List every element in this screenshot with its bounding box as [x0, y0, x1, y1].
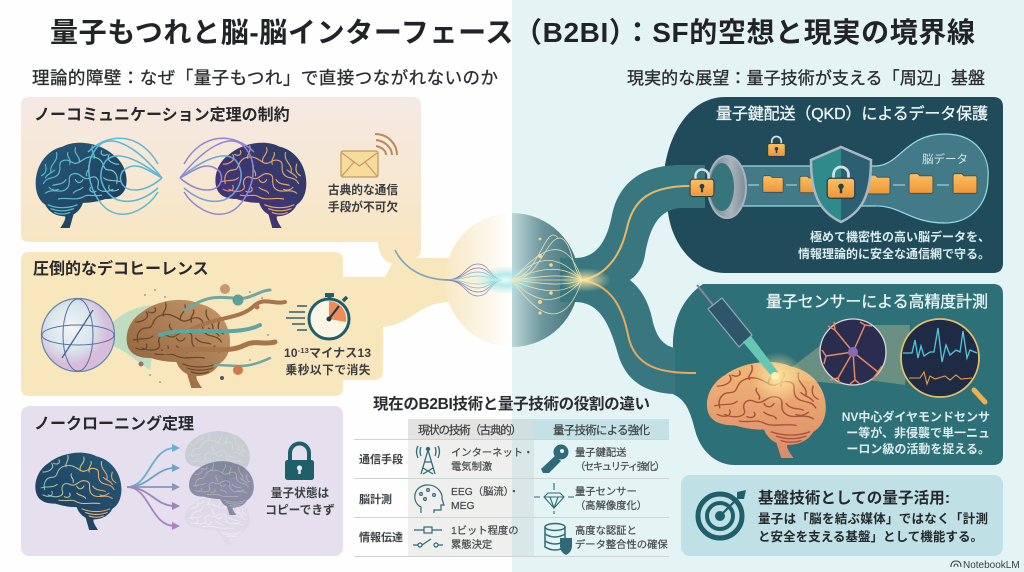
heading: 圧倒的なデコヒーレンス: [33, 259, 209, 278]
icon: orange brain: [707, 362, 826, 458]
icon: left brain: [36, 143, 127, 228]
row: communication: [416, 444, 665, 474]
icon: probe: [697, 285, 779, 380]
description: ー等が、非侵襲で単一ニュ: [846, 425, 990, 440]
arrows: [127, 448, 175, 526]
icon: stopwatch: [286, 293, 349, 339]
note: マイナス13: [309, 346, 371, 360]
icon: small lock: [768, 136, 785, 156]
row: brain measurement: 量子センサー: [575, 486, 637, 498]
row: information transfer: データ整合性の確保: [575, 538, 668, 551]
icon: neuron circle: [820, 319, 886, 385]
description: NV中心ダイヤモンドセンサ: [842, 409, 990, 424]
icon: pipe ring: [708, 156, 746, 218]
icon: switches: [413, 527, 443, 547]
column headers: 現状の技術（古典的）: [418, 423, 522, 437]
fan dots: [538, 238, 553, 315]
note: [265, 486, 335, 517]
panel: decoherence background with connector: [21, 252, 450, 396]
icon: signal arcs: [375, 134, 397, 155]
label: brain data: 脳データ: [922, 152, 968, 166]
teal swath: [110, 305, 160, 370]
icon: diamond sensor: [534, 483, 574, 514]
panel: quantum sensor content: [697, 285, 990, 458]
row: information transfer: 高度な認証と: [575, 524, 637, 537]
row: brain measurement: [415, 483, 647, 514]
icon: head with EEG: [415, 485, 444, 513]
right fan lines: [512, 235, 582, 314]
title: 量子もつれと脳-脳インターフェース（B2BI）：SF的空想と現実の境界線: [50, 17, 975, 48]
row: information transfer: 1ビット程度の: [451, 524, 519, 537]
connector bands to right panels: [560, 165, 705, 394]
row: communication: （セキュリティ強化）: [575, 460, 665, 473]
heading: ノークローニング定理: [34, 414, 194, 433]
icon: right brain: [215, 143, 306, 228]
row labels: [359, 452, 403, 544]
particles: [138, 284, 269, 383]
heading: 現在のB2BI技術と量子技術の役割の違い: [373, 394, 650, 413]
row: communication: 量子鍵配送: [575, 446, 626, 459]
icon: waveform magnifier: [901, 319, 985, 402]
background: [681, 475, 1003, 556]
central circle: right half: [512, 213, 579, 347]
icon: target: [698, 490, 746, 538]
note: 量子状態は: [271, 486, 330, 500]
icon: Bloch sphere: [42, 298, 114, 372]
entanglement waves left: [88, 138, 162, 214]
cyan glow: [474, 266, 538, 294]
rules: [354, 440, 669, 556]
panel: QKD content: [690, 104, 990, 261]
glow: [752, 352, 804, 404]
note: 乗秒以下で消失: [286, 363, 371, 377]
note: [328, 183, 398, 214]
icon: database shield: [545, 524, 572, 555]
icon: decohering brain: [127, 300, 230, 388]
icon: source brain: [35, 453, 121, 530]
body: [758, 511, 988, 544]
entanglement waves right: [180, 138, 254, 214]
note: コピーできず: [265, 503, 335, 517]
background: left half: [0, 0, 512, 572]
icon: antenna: [416, 446, 440, 474]
icon: ghost brain middle: [189, 461, 254, 515]
panel: no-communication theorem content: [34, 106, 398, 228]
background: right half: [512, 0, 1024, 572]
junction glow: [559, 268, 611, 292]
row labels: 通信手段: [359, 452, 403, 466]
arrow heads: [172, 444, 180, 530]
note: 手段が不可欠: [328, 200, 398, 214]
central quantum link: [395, 186, 696, 373]
note: -13: [298, 346, 309, 355]
icon: ghost brain top: [185, 431, 250, 485]
dissolving streams: [160, 290, 285, 366]
panel: no-cloning theorem: [21, 406, 343, 556]
body: 量子は「脳を結ぶ媒体」ではなく「計測: [758, 511, 988, 526]
callout beams: [778, 325, 910, 385]
heading: 基盤技術としての量子活用:: [758, 488, 950, 507]
row: brain measurement: （高解像度化）: [575, 499, 647, 512]
icon: envelope: [341, 151, 378, 177]
panel: no-communication background with connector: [21, 97, 421, 263]
panel: QKD background: [665, 97, 1003, 273]
right section heading: 現実的な展望：量子技術が支える「周辺」基盤: [627, 69, 985, 88]
glass tube and bulb: [735, 134, 988, 223]
icon: shield: [811, 147, 871, 222]
row labels: 脳計測: [359, 492, 392, 506]
column headers: [418, 423, 650, 437]
tail line into left lens: [395, 250, 450, 280]
central circle: left half: [445, 213, 512, 347]
description: 情報理論的に安全な通信網で守る。: [798, 246, 990, 261]
folders: [748, 174, 977, 194]
icon: ghost brain bottom: [185, 496, 250, 545]
icon: lock: [285, 444, 314, 480]
description: [798, 229, 990, 261]
panel: decoherence content: [33, 259, 371, 388]
heading: 量子センサーによる高精度計測: [766, 293, 988, 311]
row: information transfer: 累態決定: [451, 538, 492, 551]
panel: quantum sensor background: [660, 284, 1003, 465]
row labels: 情報伝達: [359, 530, 403, 544]
gold signal lines: [582, 186, 690, 280]
row: communication: 電気制激: [451, 460, 493, 473]
heading: ノーコミュニケーション定理の制約: [34, 106, 290, 124]
row: information transfer: [413, 524, 668, 555]
panel: foundation summary: [681, 475, 1003, 556]
left section heading: 理論的障壁：なぜ「量子もつれ」で直接つながれないのか: [32, 68, 498, 88]
column headers: 量子技術による強化: [553, 423, 650, 437]
description: [842, 409, 990, 456]
row: brain measurement: EEG（脳流）・: [451, 486, 519, 498]
heading: 量子鍵配送（QKD）によるデータ保護: [716, 104, 988, 123]
icon: key: [541, 444, 568, 473]
row: communication: インターネット・: [451, 447, 533, 459]
note: 古典的な通信: [328, 183, 398, 197]
row: brain measurement: MEG: [451, 501, 474, 512]
description: ーロン級の活動を捉える。: [846, 441, 990, 456]
note: [284, 346, 371, 377]
description: 極めて機密性の高い脳データを、: [810, 229, 990, 244]
left lens lines: [445, 264, 505, 296]
watermark: NotebookLM: NotebookLM: [963, 560, 1020, 571]
note: 10: [284, 346, 298, 360]
background: [21, 406, 343, 556]
body: と安全を支える基盤」として機能する。: [758, 529, 983, 544]
icon: pipe lock: [690, 170, 714, 197]
column backgrounds: [408, 419, 669, 556]
panel: comparison table: [354, 394, 669, 556]
